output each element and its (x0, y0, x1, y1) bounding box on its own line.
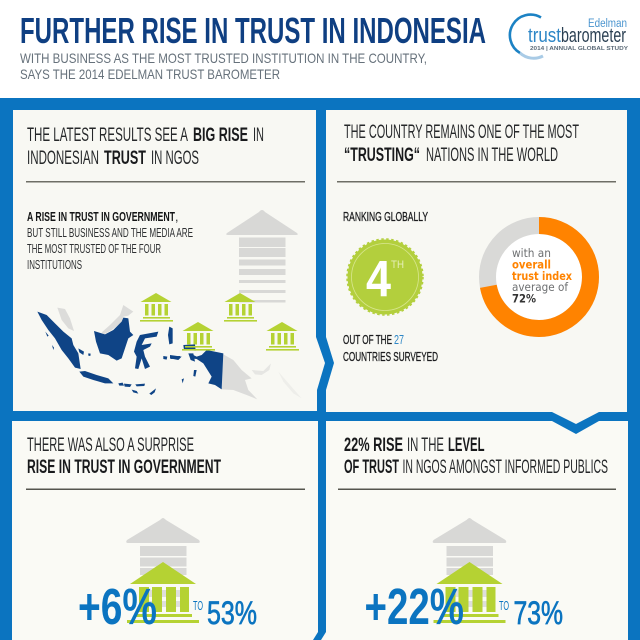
panel: top right (326, 110, 627, 424)
subtitle: WITH BUSINESS AS THE MOST TRUSTED INSTITUTION IN THE COUNTRY, (20, 50, 427, 66)
icon: government building 1 (140, 293, 173, 322)
stat: +6% to 53%: 53% (207, 595, 257, 631)
logo: Edelman trust barometer: Edelman (588, 18, 627, 30)
heading: trusting nations (344, 122, 579, 166)
donut chart: overall trust index 72%: average of (512, 280, 569, 294)
heading: 22% rise among informed publics: 22% RISE (344, 435, 403, 456)
text block: out of the 27 countries surveyed: OUT OF THE (343, 333, 392, 347)
stat: +6% to 53% (78, 578, 257, 635)
heading: big rise in trust in NGOs (27, 125, 264, 169)
heading: big rise in trust in NGOs: IN NGOS (151, 148, 199, 169)
badge: 4th: TH (391, 259, 404, 271)
icon: government building 4 (266, 322, 299, 351)
stat: +22% to 73% (364, 578, 563, 635)
map of Indonesia (37, 305, 302, 399)
heading: surprise rise in trust in government: RISE IN TRUST IN GOVERNMENT (27, 457, 221, 478)
icon: government building 3 (182, 322, 215, 351)
text block: rise in trust in government: A RISE IN TRUST IN GOVERNMENT (27, 210, 175, 224)
heading: big rise in trust in NGOs: INDONESIAN (27, 148, 99, 169)
heading: 22% rise among informed publics: LEVEL (448, 435, 485, 456)
panel: bottom right (321, 421, 628, 640)
text block: rise in trust in government: INSTITUTIONS (27, 258, 82, 272)
donut chart: overall trust index 72%: overall (512, 258, 551, 272)
donut chart: overall trust index 72%: 72% (512, 292, 536, 306)
heading: big rise in trust in NGOs: BIG RISE (193, 125, 248, 146)
logo: Edelman trust barometer (510, 15, 628, 58)
stat: +22% to 73%: +22% (364, 578, 464, 635)
heading: surprise rise in trust in government: THERE WAS ALSO A SURPRISE (27, 435, 194, 456)
icon: arrow and building, government (126, 518, 200, 623)
text block: out of the 27 countries surveyed (343, 333, 438, 364)
icon: government building 2 (224, 293, 257, 322)
text block: rise in trust in government (27, 210, 193, 272)
text block: out of the 27 countries surveyed: 27 (394, 333, 404, 347)
heading: 22% rise among informed publics: IN THE (407, 435, 444, 456)
stat: +6% to 53%: TO (193, 598, 203, 613)
text block: rise in trust in government: BUT STILL BUSINESS AND THE MEDIA ARE (27, 226, 193, 240)
logo: Edelman trust barometer: 2014 | ANNUAL GLOBAL STUDY (530, 46, 628, 52)
heading: big rise in trust in NGOs: THE LATEST RESULTS SEE A (27, 125, 188, 146)
panel: bottom left (12, 421, 318, 640)
heading: 22% rise among informed publics (344, 435, 608, 478)
label: ranking globally: RANKING GLOBALLY (343, 210, 428, 224)
text block: out of the 27 countries surveyed: COUNTRIES SURVEYED (343, 350, 438, 364)
text block: rise in trust in government: , (175, 210, 178, 224)
heading: big rise in trust in NGOs: TRUST (104, 148, 146, 169)
subtitle (20, 50, 427, 82)
icon: grey rising arrow (226, 210, 298, 302)
heading: trusting nations: “TRUSTING“ (344, 145, 420, 166)
donut chart: overall trust index 72%: trust index (512, 269, 572, 283)
donut chart: overall trust index 72%: with an (512, 246, 551, 260)
subtitle: SAYS THE 2014 EDELMAN TRUST BAROMETER (20, 66, 280, 82)
heading: 22% rise among informed publics: OF TRUST (344, 457, 399, 478)
icon: arrow and building, NGOs (433, 518, 506, 623)
heading: surprise rise in trust in government (27, 435, 221, 478)
stat: +22% to 73%: TO (499, 598, 509, 613)
stat: +22% to 73%: 73% (514, 595, 563, 631)
badge: 4th: 4 (366, 250, 392, 307)
panel: top left (13, 110, 325, 411)
stat: +6% to 53%: +6% (78, 578, 157, 635)
logo: Edelman trust barometer: trust (528, 25, 561, 47)
donut chart: overall trust index 72% (488, 226, 590, 328)
heading: big rise in trust in NGOs: IN (253, 125, 264, 146)
badge: 4th (347, 239, 423, 315)
text block: rise in trust in government: THE MOST TRUSTED OF THE FOUR (27, 242, 161, 256)
